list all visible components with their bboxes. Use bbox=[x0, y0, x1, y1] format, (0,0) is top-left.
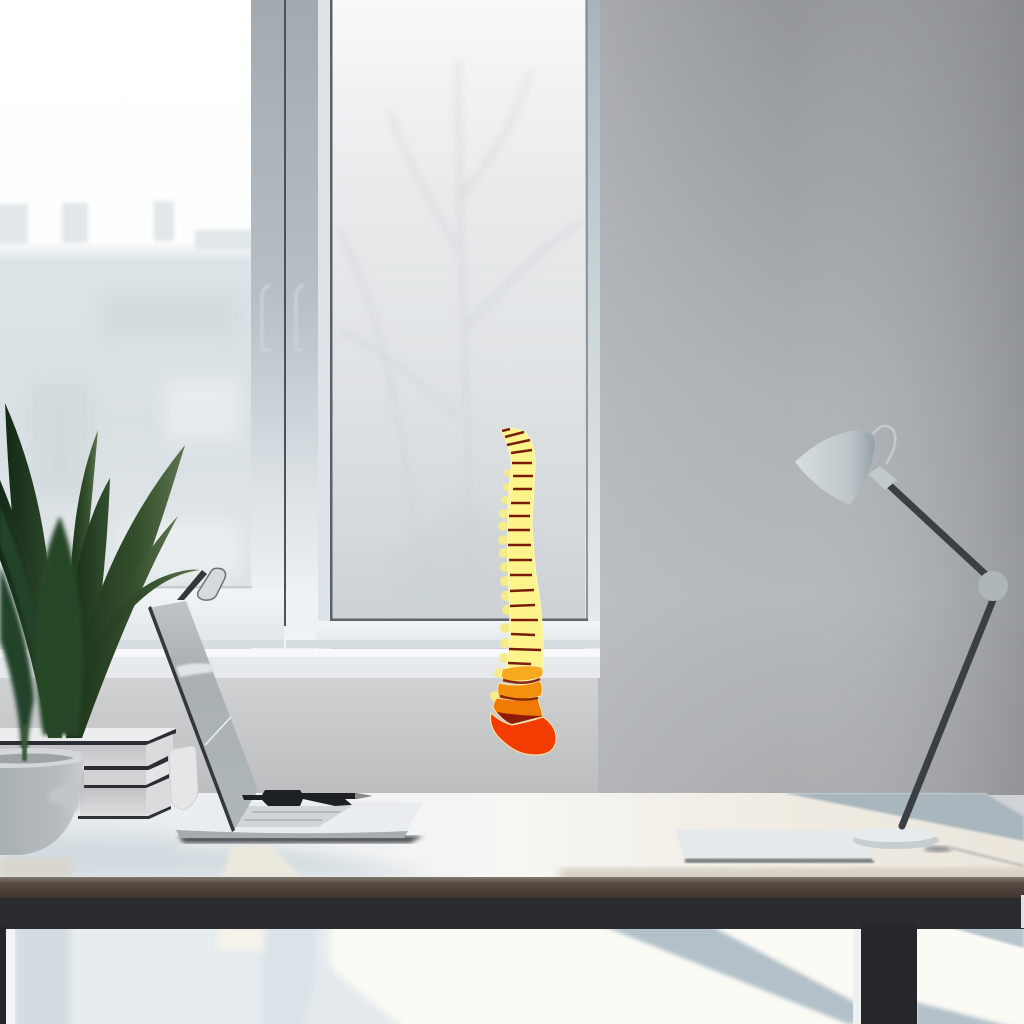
orange lumbar vertebra bbox=[502, 666, 543, 681]
dark wedge above sacrum bbox=[497, 712, 543, 724]
vertebra side nubs bbox=[490, 469, 514, 701]
laptop base and keyboard bbox=[176, 802, 423, 843]
window frame bbox=[112, 0, 600, 650]
window sill bbox=[0, 649, 600, 678]
disc lines bbox=[502, 429, 541, 664]
red sacrum bbox=[491, 713, 556, 755]
lamp hook bbox=[873, 426, 895, 464]
wall bbox=[598, 0, 1024, 795]
lamp joint bbox=[978, 571, 1008, 601]
orange vertebra middle bbox=[498, 681, 542, 700]
small white device bbox=[169, 746, 198, 810]
desk front edge and frame bbox=[0, 877, 1024, 929]
spine illustration bbox=[490, 428, 556, 755]
orange vertebra lower bbox=[493, 698, 543, 724]
window handles bbox=[262, 285, 304, 350]
notepad on desk bbox=[676, 830, 875, 863]
books stack bbox=[0, 728, 176, 819]
clip on laptop bbox=[177, 568, 226, 600]
desk lamp bbox=[795, 426, 1008, 852]
wall below sill bbox=[0, 678, 598, 796]
lamp head connector bbox=[868, 466, 897, 490]
yellow spine column bbox=[501, 428, 543, 668]
plant pot bbox=[0, 725, 83, 855]
laptop screen bbox=[148, 601, 258, 832]
lamp base bbox=[852, 828, 952, 852]
lower disc bbox=[500, 696, 538, 700]
window glass: right pane with blurred tree bbox=[330, 0, 588, 622]
lamp shade bbox=[795, 430, 875, 505]
pen on laptop bbox=[242, 790, 372, 806]
floor with sunlight bands bbox=[0, 915, 1024, 1024]
desk legs bbox=[0, 925, 917, 1024]
lamp arms bbox=[888, 484, 993, 826]
plant leaves bbox=[0, 403, 200, 760]
desk top bbox=[0, 793, 1024, 882]
window glass: left pane with blurred skyline bbox=[0, 0, 255, 652]
upper disc bbox=[503, 679, 540, 683]
